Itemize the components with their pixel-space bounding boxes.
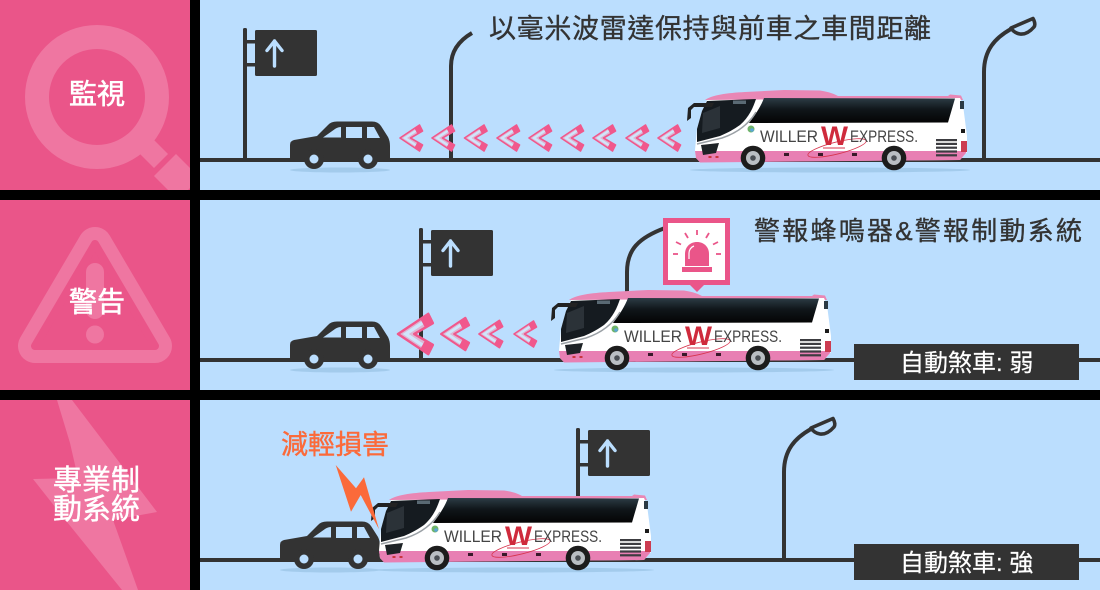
street lamp, middle [451,33,472,160]
road sign [243,28,317,160]
bus: EXPRESS. [850,127,918,146]
panel: braking row [0,400,1100,590]
bus: W [505,521,533,551]
street lamp [627,228,665,360]
icon: warning triangle [35,244,155,346]
bus: WILLER [624,327,682,346]
monitoring sidebar [0,0,200,200]
bus [371,490,654,572]
bus: W [685,321,713,351]
street lamp, right [984,18,1035,160]
label: damage reduction: 減輕損害 [281,430,389,460]
icon: lightning bolt [33,400,157,590]
icon: magnifier [37,37,200,200]
label: weak auto braking: 自動煞車: 弱 [900,350,1033,377]
car [290,322,390,372]
heading: alarm and braking: 警報蜂鳴器&警報制動系統 [754,216,1082,246]
braking sidebar [0,400,190,590]
label: 監視: 監視 [69,78,125,110]
label: 專業制動系統 [53,464,140,526]
bus: EXPRESS. [714,327,782,346]
heading: keep distance: 以毫米波雷達保持與前車之車間距離 [489,14,931,44]
label: 專業制動系統: 專業制 [53,464,140,497]
label: weak auto braking [854,344,1079,380]
street lamp [784,418,835,560]
label: strong auto braking: 自動煞車: 強 [900,550,1033,577]
icon: impact spark [336,465,379,529]
icon: alarm beacon callout [666,220,728,292]
bus: W [821,121,849,151]
radar chevrons [400,125,680,151]
car [280,522,380,572]
road sign [419,228,493,360]
warning sidebar [0,200,190,390]
panel: monitoring row [0,0,1100,200]
bus: EXPRESS. [534,527,602,546]
label: 專業制動系統: 動系統 [53,493,140,526]
road sign [576,428,650,560]
bus: WILLER [444,527,502,546]
label: strong auto braking [854,544,1079,580]
bus [551,290,834,372]
bus [687,90,970,172]
label: 警告: 警告 [69,286,125,318]
car [290,122,390,172]
bus: WILLER [760,127,818,146]
panel: warning row [0,200,1100,390]
radar chevrons [398,314,536,354]
